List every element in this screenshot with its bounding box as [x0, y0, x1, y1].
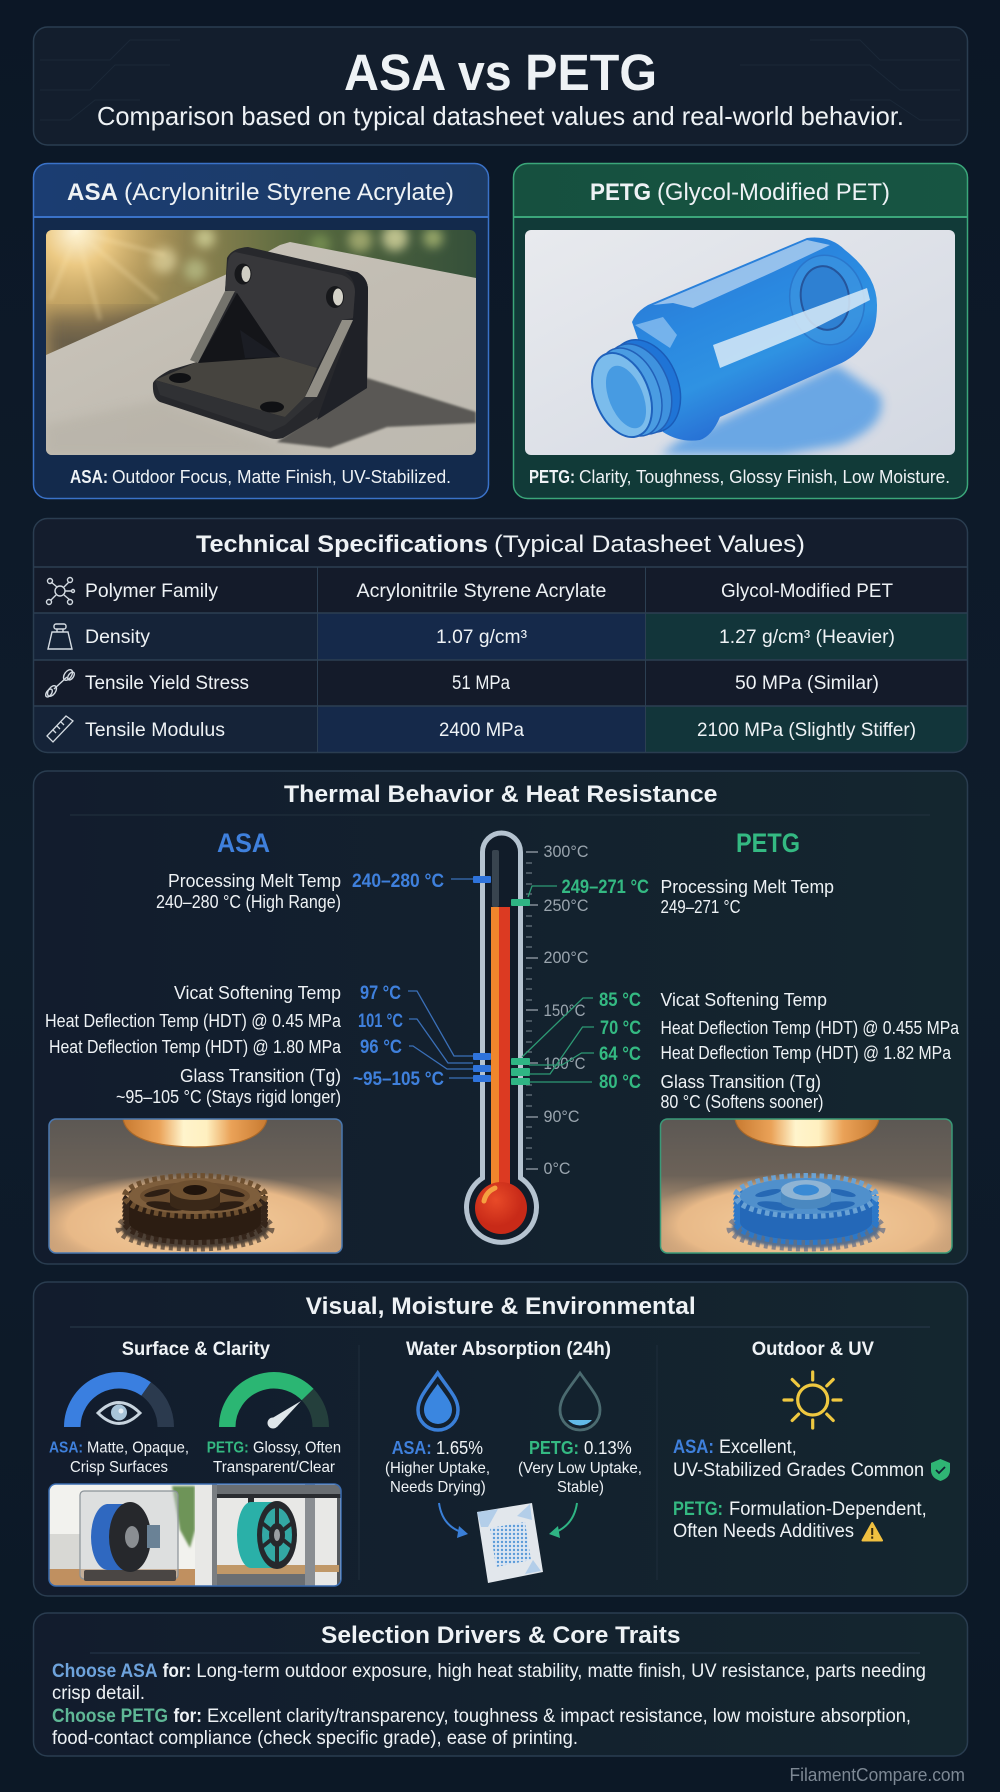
icon: PETG water drop	[560, 1373, 600, 1430]
row: polymer family: Acrylonitrile Styrene Acrylate	[356, 581, 606, 602]
row: density: Density	[85, 627, 151, 648]
choose PETG text: for:	[174, 1705, 202, 1727]
PETG surface text: Glossy, Often	[253, 1440, 341, 1456]
thermal heading: Thermal Behavior & Heat Resistance	[284, 781, 718, 808]
PETG thermal column: 249–271 °C	[660, 897, 740, 917]
PETG UV text	[673, 1499, 927, 1542]
ASA thermal column: 101 °C	[358, 1011, 403, 1032]
ASA UV text: Excellent,	[719, 1437, 797, 1458]
temperature scale: 0°C	[544, 1160, 571, 1178]
PETG thermal column: Processing Melt Temp	[660, 876, 834, 897]
photo: filament spools in storage	[49, 1484, 341, 1586]
ASA UV text: UV-Stabilized Grades Common	[673, 1460, 924, 1481]
ASA thermal column: 240–280 °C	[352, 871, 444, 892]
ASA thermal column: Heat Deflection Temp (HDT) @ 1.80 MPa	[49, 1037, 342, 1057]
panel: ASA material card	[32, 162, 490, 500]
ASA absorption text: (Higher Uptake,	[385, 1460, 490, 1477]
PETG caption: Clarity, Toughness, Glossy Finish, Low Moisture.	[579, 466, 950, 487]
PETG thermal column: Heat Deflection Temp (HDT) @ 0.455 MPa	[660, 1018, 960, 1038]
row: tensile yield stress	[44, 668, 879, 698]
temperature scale: 100°C	[544, 1055, 586, 1073]
photo: ASA gear under heat lamp	[48, 1118, 343, 1254]
PETG thermal column: PETG	[736, 828, 800, 858]
PETG absorption text: 0.13%	[584, 1438, 632, 1458]
ASA surface text: Crisp Surfaces	[70, 1459, 168, 1476]
column: outdoor and UV	[673, 1338, 950, 1542]
environmental heading: Visual, Moisture & Environmental	[306, 1293, 696, 1320]
row: tensile modulus: 2100 MPa (Slightly Stiffer)	[697, 720, 916, 741]
ASA thermal column: ~95–105 °C (Stays rigid longer)	[116, 1087, 341, 1107]
photo: blue PETG bottle	[525, 230, 955, 455]
ASA surface text	[49, 1440, 189, 1476]
PETG thermal column: 80 °C (Softens sooner)	[660, 1092, 824, 1112]
choose PETG text: food-contact compliance (check specific grade), ease of printing.	[52, 1727, 578, 1749]
PETG surface text	[207, 1440, 341, 1476]
temperature scale	[526, 843, 589, 1178]
choose PETG text	[52, 1705, 911, 1749]
choose ASA text: Choose ASA	[52, 1660, 158, 1682]
ASA thermal column: Vicat Softening Temp	[174, 982, 341, 1003]
table heading: Technical Specifications	[196, 531, 488, 558]
PETG thermal column: 249–271 °C	[562, 877, 649, 898]
PETG card heading: (Glycol-Modified PET)	[657, 179, 890, 206]
row: tensile modulus	[47, 716, 916, 742]
choose ASA text	[52, 1660, 926, 1704]
ASA card heading: ASA	[67, 179, 118, 206]
row: tensile modulus: Tensile Modulus	[85, 720, 225, 741]
PETG caption: PETG:	[529, 466, 575, 487]
row: polymer family: Polymer Family	[85, 581, 219, 602]
column: surface and clarity	[49, 1338, 341, 1586]
row: tensile yield stress: Tensile Yield Stress	[85, 673, 249, 694]
row: tensile modulus: 2400 MPa	[439, 720, 524, 741]
ASA leader lines	[408, 879, 473, 1078]
PETG UV text: Often Needs Additives	[673, 1521, 854, 1542]
ASA card heading: (Acrylonitrile Styrene Acrylate)	[124, 179, 454, 206]
ASA absorption text: 1.65%	[436, 1438, 483, 1458]
arrow: ASA to desiccant	[439, 1503, 468, 1538]
ASA thermal column: Processing Melt Temp	[168, 870, 341, 891]
icon: weight	[48, 624, 72, 649]
temperature scale: 250°C	[544, 897, 589, 915]
ASA caption: ASA:	[70, 466, 108, 487]
ASA surface text: Matte, Opaque,	[87, 1440, 189, 1456]
icon: ASA water drop	[418, 1373, 458, 1430]
ASA thermal column: ASA	[217, 828, 270, 858]
ASA caption: Outdoor Focus, Matte Finish, UV-Stabilized.	[112, 466, 451, 487]
ASA thermal column: Glass Transition (Tg)	[180, 1065, 341, 1086]
panel: title banner	[34, 27, 968, 145]
choose PETG text: Excellent clarity/transparency, toughness & impact resistance, low moisture absorption,	[207, 1705, 911, 1727]
panel: PETG material card	[513, 163, 968, 499]
choose PETG text: Choose PETG	[52, 1705, 168, 1727]
ASA thermal column: 97 °C	[360, 983, 401, 1004]
choose ASA text: Long-term outdoor exposure, high heat stability, matte finish, UV resistance, parts needing	[196, 1660, 926, 1682]
icon: molecule	[46, 578, 74, 604]
footer credit: FilamentCompare.com	[790, 1765, 965, 1785]
PETG leader lines	[522, 886, 594, 1082]
PETG thermal column: Vicat Softening Temp	[660, 989, 827, 1010]
panel: visual, moisture and environmental	[34, 1282, 968, 1596]
ASA temperature markers	[473, 876, 491, 1082]
PETG thermal column	[562, 828, 960, 1112]
temperature scale: 200°C	[544, 949, 589, 967]
row: tensile yield stress: 51 MPa	[452, 673, 510, 694]
row: polymer family: Glycol-Modified PET	[721, 581, 893, 602]
PETG absorption text	[518, 1438, 642, 1496]
ASA UV text	[673, 1437, 950, 1481]
photo: black ASA bracket outdoors	[46, 230, 476, 455]
photo: PETG gear under heat lamp	[660, 1118, 953, 1254]
icon: warning triangle	[862, 1523, 882, 1540]
icon: shield check	[931, 1459, 950, 1481]
choose ASA text: crisp detail.	[52, 1682, 145, 1704]
PETG surface text: Transparent/Clear	[213, 1459, 336, 1476]
subtitle: Comparison based on typical datasheet values and real-world behavior.	[97, 101, 904, 131]
PETG temperature markers	[511, 899, 530, 1085]
ASA thermal column: 96 °C	[360, 1037, 402, 1058]
table heading: (Typical Datasheet Values)	[494, 531, 805, 558]
PETG thermal column: 80 °C	[599, 1072, 641, 1093]
icon: dumbbell	[44, 668, 76, 698]
ASA thermal column: Heat Deflection Temp (HDT) @ 0.45 MPa	[45, 1011, 342, 1031]
choose ASA text: for:	[163, 1660, 191, 1682]
temperature scale: 300°C	[544, 843, 589, 861]
title: ASA vs PETG	[344, 44, 657, 101]
ASA thermal column	[45, 828, 444, 1107]
row: density: 1.27 g/cm³ (Heavier)	[719, 627, 895, 648]
selection heading: Selection Drivers & Core Traits	[321, 1622, 680, 1649]
ASA absorption text: ASA:	[392, 1438, 432, 1458]
ASA thermal column: 240–280 °C (High Range)	[156, 892, 341, 912]
row: tensile yield stress: 50 MPa (Similar)	[735, 673, 879, 694]
temperature scale: 90°C	[544, 1108, 580, 1126]
PETG UV text: PETG:	[673, 1499, 723, 1520]
panel: technical specifications table	[33, 518, 968, 753]
panel: selection drivers	[34, 1613, 968, 1756]
PETG thermal column: Glass Transition (Tg)	[660, 1071, 821, 1092]
icon: eye	[98, 1402, 140, 1424]
ASA absorption text: Needs Drying)	[390, 1479, 486, 1496]
icon: desiccant packet	[477, 1503, 543, 1583]
column: water absorption: Water Absorption (24h)	[406, 1338, 611, 1360]
panel: thermal behavior	[25, 771, 976, 1277]
gauge: ASA matte	[72, 1380, 166, 1427]
column: surface and clarity: Surface & Clarity	[122, 1338, 270, 1360]
PETG UV text: Formulation-Dependent,	[729, 1499, 927, 1520]
PETG absorption text: (Very Low Uptake,	[518, 1460, 642, 1477]
column: outdoor and UV: Outdoor & UV	[752, 1338, 874, 1360]
thermometer	[466, 833, 589, 1242]
PETG card heading: PETG	[590, 179, 651, 206]
table heading	[196, 531, 805, 558]
icon: sun	[784, 1372, 841, 1428]
PETG thermal column: Heat Deflection Temp (HDT) @ 1.82 MPa	[660, 1043, 952, 1063]
ASA thermal column: ~95–105 °C	[353, 1069, 444, 1090]
arrow: PETG to desiccant	[549, 1503, 577, 1538]
ASA UV text: ASA:	[673, 1437, 714, 1458]
ASA surface text: ASA:	[49, 1440, 83, 1456]
PETG thermal column: 64 °C	[599, 1044, 641, 1065]
PETG thermal column: 85 °C	[599, 990, 641, 1011]
icon: ruler	[47, 716, 73, 742]
row: polymer family	[46, 578, 893, 604]
PETG absorption text: PETG:	[529, 1438, 579, 1458]
bracket silhouette	[153, 247, 368, 439]
PETG surface text: PETG:	[207, 1440, 249, 1456]
ASA absorption text	[385, 1438, 490, 1496]
column: water absorption	[385, 1338, 642, 1583]
PETG thermal column: 70 °C	[600, 1018, 641, 1039]
row: density: 1.07 g/cm³	[436, 627, 527, 648]
PETG absorption text: Stable)	[557, 1479, 604, 1496]
temperature scale: 150°C	[544, 1002, 586, 1020]
row: density	[48, 624, 895, 649]
gauge: PETG gloss	[227, 1380, 321, 1428]
